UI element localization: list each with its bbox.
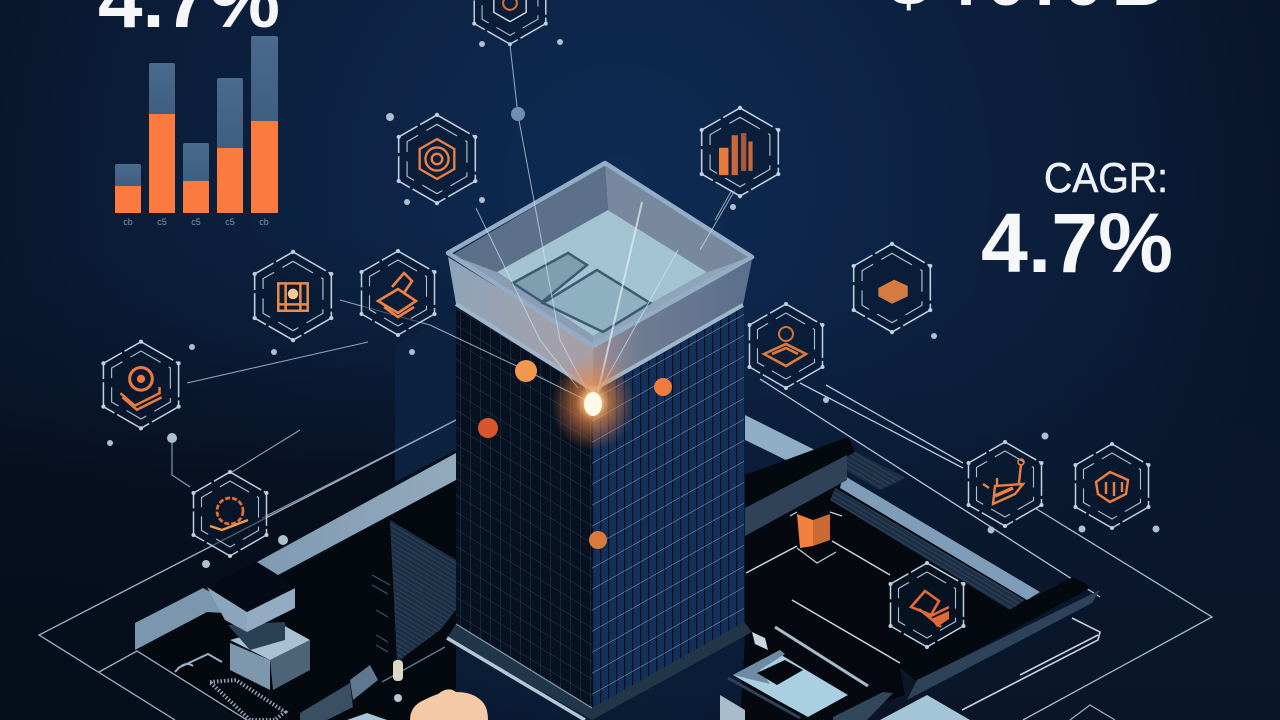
light beams bbox=[430, 115, 735, 403]
icon: excavator hexagon bbox=[748, 302, 824, 390]
connector lines and dots bbox=[107, 39, 1160, 568]
bar 1 bbox=[115, 164, 141, 213]
light band bbox=[840, 475, 1040, 600]
bar 2 bbox=[149, 63, 175, 213]
peach blob bbox=[410, 689, 488, 720]
roof floor bbox=[497, 210, 707, 336]
small equipment box bbox=[207, 562, 310, 690]
CAGR label: CAGR: bbox=[1044, 154, 1168, 201]
icon: bulldozer hexagon bbox=[888, 561, 966, 649]
icon: globe hexagon bbox=[192, 470, 268, 558]
light lower block bbox=[720, 632, 848, 720]
dark beam bbox=[745, 437, 855, 510]
icon: spiral hexagon bbox=[397, 113, 477, 205]
bar axis labels: c5 bbox=[191, 217, 201, 227]
bar chart bbox=[115, 36, 278, 227]
tower right face bbox=[592, 306, 744, 712]
icon: bars hexagon bbox=[700, 106, 780, 198]
ground plan: left bbox=[39, 312, 456, 720]
inner lines bbox=[746, 541, 900, 663]
icon: tools hexagon bbox=[253, 250, 333, 342]
bottom light block bbox=[833, 692, 970, 720]
small lamp bbox=[393, 660, 403, 702]
orange box icon bbox=[790, 507, 842, 563]
icon: machine hexagon bbox=[966, 440, 1044, 528]
icon: block hexagon bbox=[852, 242, 932, 334]
far right corner bbox=[1070, 705, 1115, 720]
grate bbox=[210, 680, 285, 720]
bar 5 bbox=[251, 36, 278, 213]
bar axis labels: cb bbox=[259, 217, 269, 227]
parapet front walls bbox=[448, 257, 593, 390]
tower left face bbox=[456, 306, 592, 712]
glow core bbox=[551, 355, 635, 451]
roof panels bbox=[513, 253, 587, 302]
bar axis labels: c5 bbox=[157, 217, 167, 227]
bar axis labels bbox=[123, 217, 269, 227]
hexagon icons bbox=[101, 0, 1151, 649]
orange nodes bbox=[478, 360, 672, 549]
CAGR value: 4.7% bbox=[981, 196, 1173, 290]
icon: top hexagon bbox=[472, 0, 548, 46]
light bands bbox=[257, 453, 456, 575]
building tower bbox=[447, 163, 752, 720]
parapet inner walls bbox=[452, 165, 608, 272]
icon: gear hexagon bbox=[101, 340, 181, 430]
faint shadow behind tower bbox=[395, 312, 456, 482]
bar axis labels: c5 bbox=[225, 217, 235, 227]
wedge side dashes bbox=[372, 575, 390, 652]
bar axis labels: cb bbox=[123, 217, 133, 227]
roof inner glass bbox=[452, 255, 593, 345]
outline lines bbox=[1023, 508, 1212, 720]
roof rim bbox=[448, 163, 752, 346]
small unit bbox=[175, 654, 222, 672]
bar 3 bbox=[183, 143, 209, 213]
main beam bbox=[900, 577, 1092, 682]
tower base bbox=[447, 622, 752, 720]
icon: cube hexagon bbox=[1074, 442, 1150, 530]
ground plan: right bbox=[720, 379, 1212, 720]
slate blocks bbox=[300, 647, 445, 720]
hatched wedge building bbox=[390, 520, 456, 662]
bar 4 bbox=[217, 78, 243, 213]
icon: crane hexagon bbox=[360, 249, 436, 337]
